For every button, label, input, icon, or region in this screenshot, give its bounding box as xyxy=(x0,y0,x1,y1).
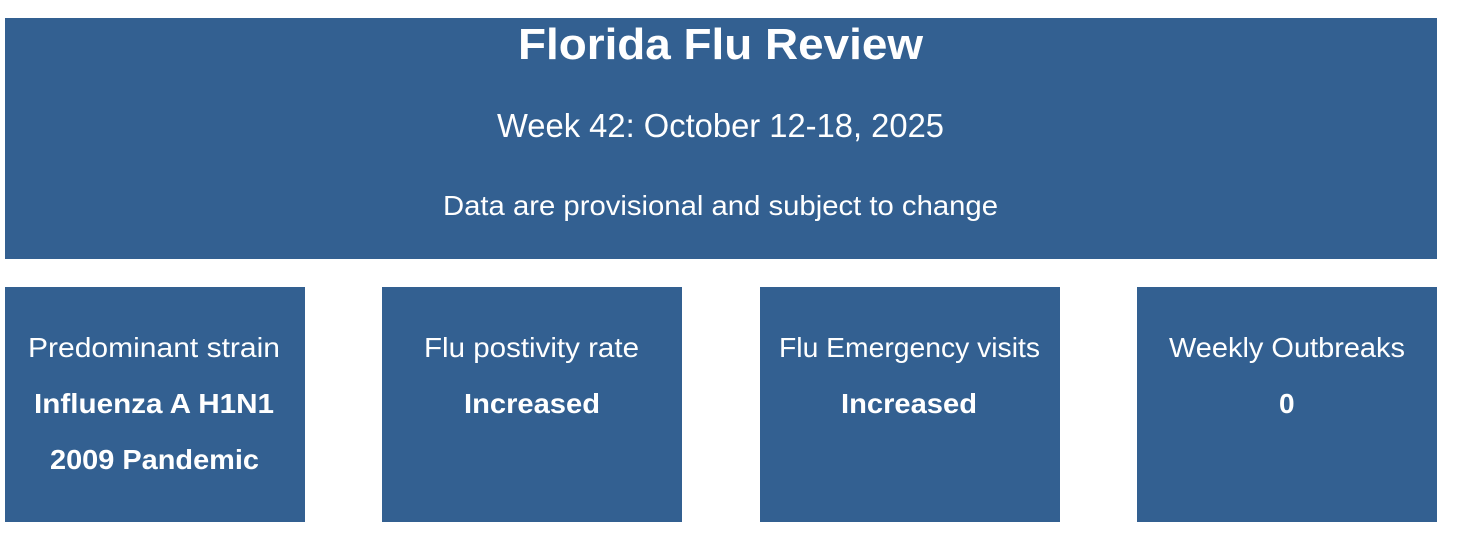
label: flu emergency visits: Flu Emergency visits xyxy=(779,332,1040,363)
value: increased: Increased xyxy=(464,388,600,419)
label: flu positivity rate: Flu postivity rate xyxy=(424,332,639,363)
value: Influenza A H1N1: Influenza A H1N1 xyxy=(34,388,274,419)
week subtitle: Week 42: October 12-18, 2025 xyxy=(497,107,944,144)
value: increased: Increased xyxy=(841,388,977,419)
title: Florida Flu Review xyxy=(518,20,924,69)
label: weekly outbreaks: Weekly Outbreaks xyxy=(1169,332,1405,363)
panel: predominant strain xyxy=(5,287,305,522)
label: predominant strain: Predominant strain xyxy=(28,332,280,363)
header banner xyxy=(5,18,1437,259)
provisional data note: Data are provisional and subject to change xyxy=(443,190,998,221)
value: 2009 Pandemic: 2009 Pandemic xyxy=(50,444,259,475)
panel: weekly outbreaks xyxy=(1137,287,1437,522)
panel: flu positivity rate xyxy=(382,287,682,522)
value: zero: 0 xyxy=(1279,388,1295,419)
panel: flu emergency visits xyxy=(760,287,1060,522)
